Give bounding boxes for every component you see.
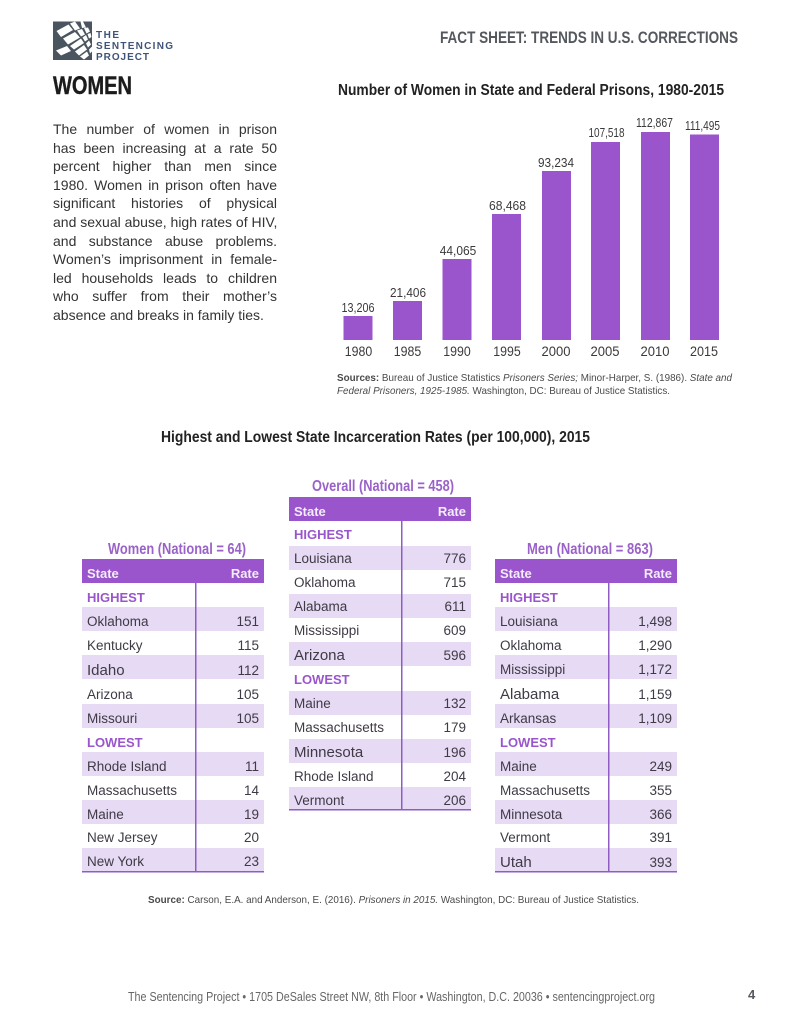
table rows: women: Idaho [87,662,125,679]
table title: overall: Overall (National = 458) [312,478,454,495]
table rows: women: Oklahoma [87,614,149,629]
bar: 2000: 93,234 [538,156,574,170]
table rows: overall: 206 [443,793,466,808]
table rows: women: 105 [236,711,259,726]
bar: 2015 [685,119,720,359]
bar: 1980 [342,301,375,359]
table rows: overall: 596 [443,648,466,663]
bar: 2005: 107,518 [588,126,625,140]
logo: The Sentencing Project: SENTENCING [96,41,173,52]
bar: 1990: 1990 [443,344,471,359]
table rows: men: 1,159 [638,687,672,702]
table header: women: State [87,566,119,581]
table rows: women: 151 [236,614,259,629]
table header: men: Rate [644,566,672,581]
table rows: men: 393 [649,855,672,870]
table: overall [289,478,471,810]
bar: 2000 [538,156,574,359]
table rows: overall: Mississippi [294,623,359,638]
logo: The Sentencing Project: PROJECT [96,52,149,63]
table rows: women: HIGHEST [87,590,145,605]
section heading: state incarceration rates: Highest and Lowest State Incarceration Rates (per 100,000), 2015 [161,429,590,446]
table rows: men: Utah [500,854,532,871]
table rows: women: 23 [244,854,259,869]
table rows: women: Massachusetts [87,783,177,798]
table rows: men: Massachusetts [500,783,590,798]
table rows: women: Missouri [87,711,137,726]
table rows: women: Maine [87,807,124,822]
table title: men: Men (National = 863) [527,541,653,558]
logo: The Sentencing Project [53,22,173,63]
bar: 2015: 111,495 [685,119,720,133]
bar: 1995 [489,199,526,359]
table: women [82,541,264,872]
text block: intro paragraph: and substance abuse problems. [53,233,277,249]
footer: The Sentencing Project • 1705 DeSales Street NW, 8th Floor • Washington, D.C. 20036 • sentencingproject.org [128,990,655,1004]
table rows: women: Rhode Island [87,759,167,774]
table rows: women: Arizona [87,687,133,702]
table rows: women: Kentucky [87,638,143,653]
table rows: overall: Louisiana [294,551,352,566]
table rows: men: 1,498 [638,614,672,629]
table rows: men: Mississippi [500,662,565,677]
table rows: men: 1,172 [638,662,672,677]
text block: intro paragraph: The number of women in prison [53,121,277,137]
bar: 1990: 44,065 [440,244,476,258]
table rows: overall: 196 [443,745,466,760]
text block: intro paragraph: and sexual abuse, high rates of HIV, [53,214,277,230]
table rows: overall: Massachusetts [294,720,384,735]
chart sources [337,372,733,397]
table rows: men: Arkansas [500,711,557,726]
table rows: women: 105 [236,687,259,702]
heading: Women: WOMEN [53,72,132,100]
table rows: women: 115 [237,638,259,653]
table: men [495,541,677,872]
table rows: men: Alabama [500,686,560,703]
table rows: women: New Jersey [87,830,158,845]
bar: 2010 [636,116,673,359]
chart sources: Federal Prisoners, 1925-1985. Washington, DC: Bureau of Justice Statistics. [337,385,670,397]
table rows: men: 249 [649,759,672,774]
bar chart: women in prison 1980-2015 [342,116,720,359]
table rows: women: 19 [244,807,259,822]
text block: intro paragraph: who suffer from their mother’s [53,288,277,304]
table rows: overall: Minnesota [294,744,364,761]
bar: 2010: 112,867 [636,116,673,130]
table rows: overall: Vermont [294,793,345,808]
table rows: overall: 776 [443,551,466,566]
table rows: men: 366 [649,807,672,822]
table rows: overall: 715 [443,575,466,590]
table rows: overall: 179 [443,720,466,735]
table rows: women: 20 [244,830,259,845]
text block: intro paragraph: percent higher than men since [53,158,277,174]
bar: 1985: 21,406 [390,286,426,300]
text block: intro paragraph: Women’s imprisonment in female- [53,251,277,267]
table rows: men: Vermont [500,830,551,845]
bar: 2000: 2000 [542,344,570,359]
bar: 1995: 1995 [493,344,521,359]
table rows: women [82,583,264,872]
table header: overall: State [294,504,326,519]
table rows: women: 11 [245,759,259,774]
table rows: overall: Rhode Island [294,769,374,784]
bar: 1980: 1980 [345,344,372,359]
text block: intro paragraph: significant histories of physical [53,195,277,211]
table rows: men: 1,290 [638,638,672,653]
table rows: overall: 609 [443,623,466,638]
table rows: overall: Alabama [294,599,348,614]
table source: Source: Carson, E.A. and Anderson, E. (2016). Prisoners in 2015. Washington, DC: Bureau of Justice Statistics. [148,894,639,906]
table rows: overall: LOWEST [294,672,350,687]
table header: men: State [500,566,532,581]
text block: intro paragraph: absence and breaks in family ties. [53,307,264,323]
table rows: men: Maine [500,759,537,774]
logo: The Sentencing Project: THE [96,30,119,41]
table rows: men: Louisiana [500,614,558,629]
bar: 2010: 2010 [640,344,670,359]
table title: women: Women (National = 64) [108,541,246,558]
text block: intro paragraph: 1980. Women in prison often have [53,177,277,193]
table rows: overall: Arizona [294,647,346,664]
table rows: men: HIGHEST [500,590,558,605]
table rows: women: 14 [244,783,259,798]
chart sources: Sources: Bureau of Justice Statistics Prisoners Series; Minor-Harper, S. (1986). State and [337,372,733,384]
table rows: men: 1,109 [638,711,672,726]
table rows: men: Minnesota [500,807,563,822]
table rows: women: New York [87,854,144,869]
table rows: women: 112 [237,663,259,678]
table header: women: Rate [231,566,259,581]
table rows: women: LOWEST [87,735,143,750]
table rows: overall: Maine [294,696,331,711]
bar: 1995: 68,468 [489,199,526,213]
table rows: men: Oklahoma [500,638,562,653]
bar: 1990 [440,244,476,359]
table header: overall [289,497,471,521]
bar: 1985 [390,286,426,359]
table rows: overall: 611 [444,599,466,614]
table rows: men [495,583,677,872]
bar: 2005 [588,126,625,359]
table rows: overall: 204 [443,769,466,784]
table rows: overall [289,521,471,810]
table rows: overall: HIGHEST [294,527,352,542]
table rows: overall: 132 [443,696,466,711]
table rows: men: 391 [649,830,672,845]
bar: 1985: 1985 [394,344,421,359]
bar: 1980: 13,206 [342,301,375,315]
text block: intro paragraph [53,121,277,323]
page number: 4 [748,987,756,1002]
table header: overall: Rate [438,504,466,519]
bar: 2015: 2015 [690,344,718,359]
table rows: overall: Oklahoma [294,575,356,590]
table rows: men: 355 [649,783,672,798]
text block: intro paragraph: has been increasing at a rate 50 [53,140,277,156]
text block: intro paragraph: led households leads to children [53,270,277,286]
bar: 2005: 2005 [590,344,620,359]
table header: women [82,559,264,583]
table header: men [495,559,677,583]
chart title: Number of Women in State and Federal Prisons, 1980-2015 [338,82,724,99]
table rows: men: LOWEST [500,735,556,750]
